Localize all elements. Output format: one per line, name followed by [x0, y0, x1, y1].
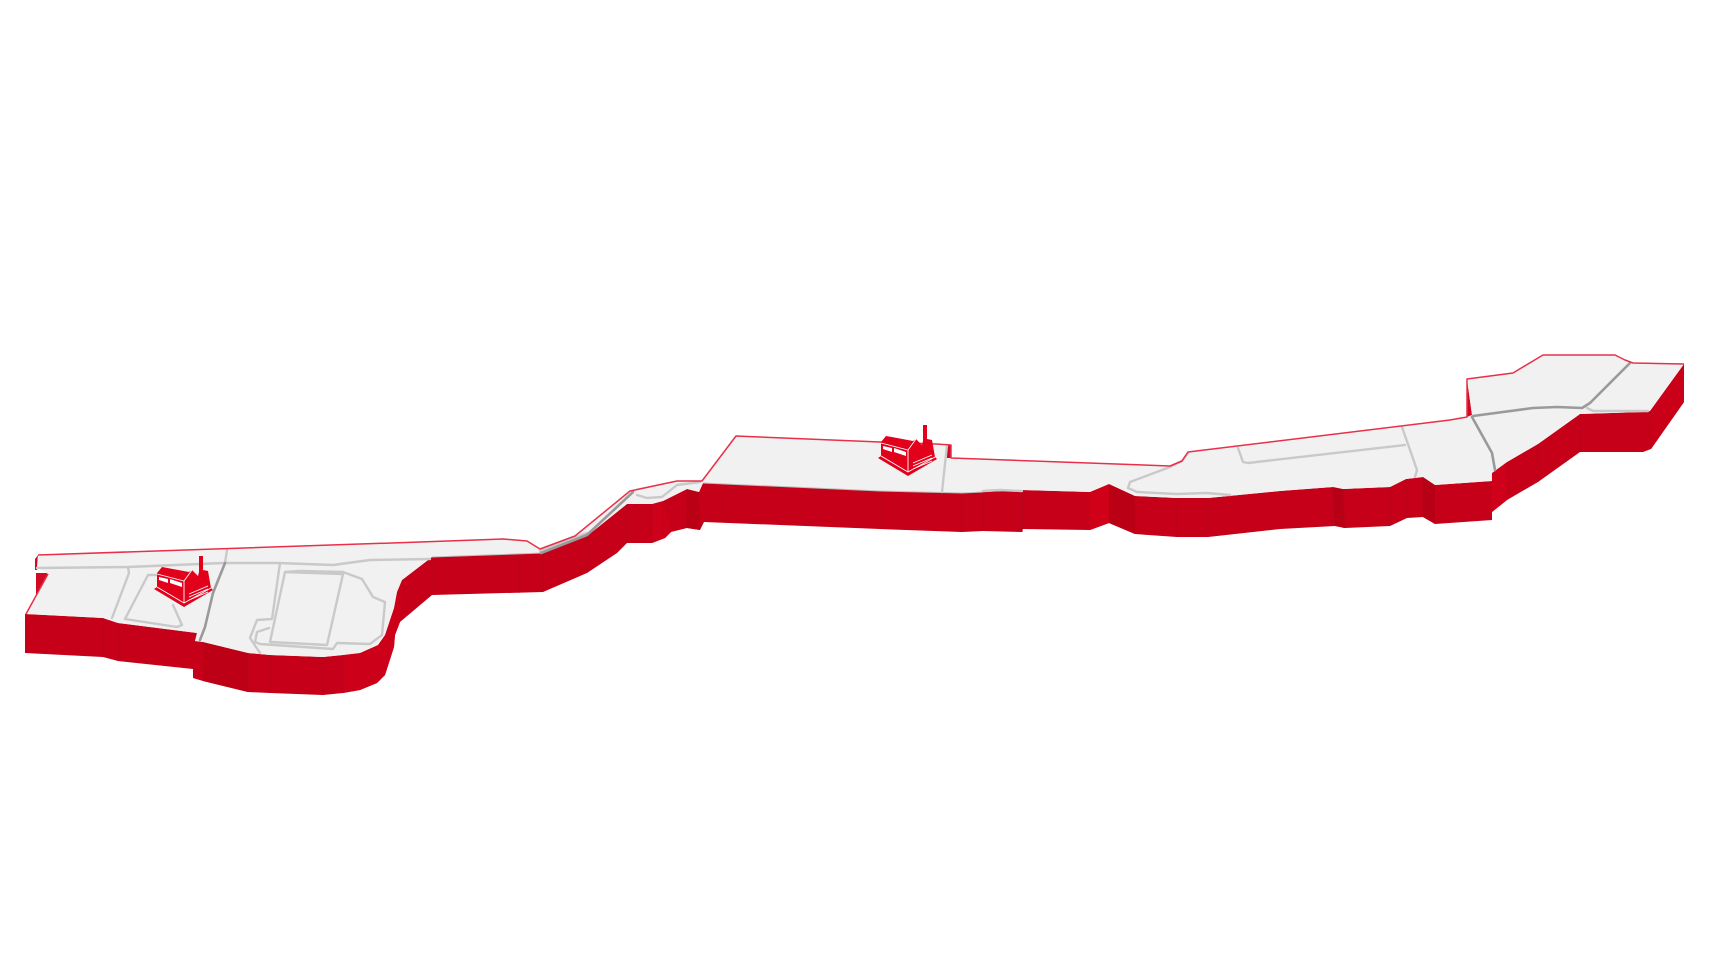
red extruded wall of the strip	[25, 364, 1684, 695]
dark road network	[200, 363, 1630, 640]
icon: factory west	[154, 556, 213, 607]
red boundary outline	[26, 355, 1684, 614]
grey top surface of the strip	[26, 355, 1684, 657]
icon: factory centre	[878, 425, 937, 476]
red side slivers	[35, 379, 1472, 597]
light road network	[37, 408, 1648, 653]
front edge shading line	[432, 483, 983, 557]
